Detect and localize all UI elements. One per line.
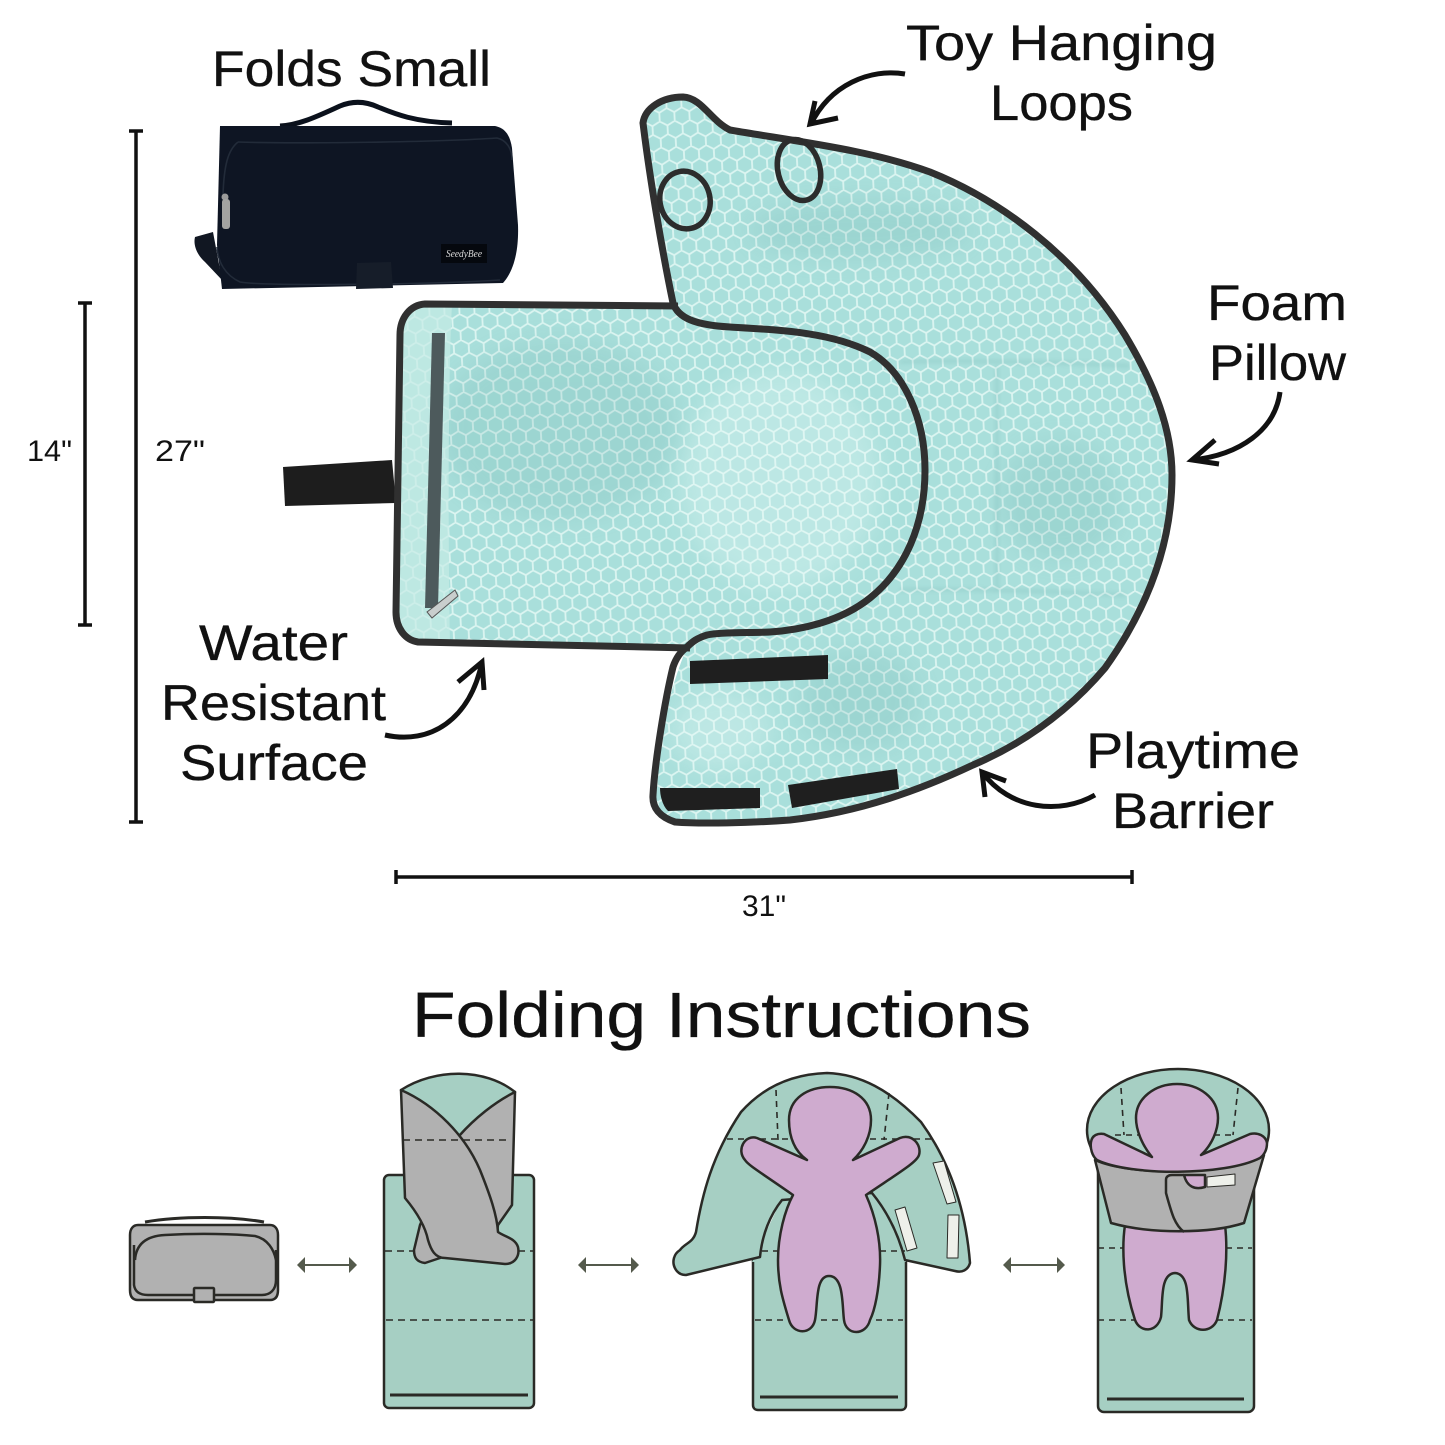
mat inner U edge (673, 303, 925, 647)
callout: Playtime Barrier (982, 723, 1300, 839)
step 3: open mat with baby (674, 1073, 970, 1410)
heading: Folds Small: Folds Small (212, 41, 491, 97)
callout: Toy Hanging Loops (810, 15, 1217, 131)
photo: folded black bag (194, 102, 518, 289)
arrow: between steps 1 and 2 (297, 1257, 357, 1273)
dimension line: 14 inch (78, 303, 92, 625)
callout: Water Resistant Surface: Resistant (161, 675, 386, 731)
label: 27 inches: 27" (155, 435, 205, 468)
velcro strips (660, 655, 899, 811)
zipper (425, 333, 458, 618)
changing panel edge (396, 304, 690, 648)
photo: folded black bag: SeedyBee (446, 249, 483, 260)
step 1: folded bag (130, 1218, 278, 1302)
black strap (283, 460, 396, 506)
step 2: half-folded mat (384, 1074, 534, 1408)
callout: Water Resistant Surface: Surface (180, 735, 368, 791)
callout: Foam Pillow: Pillow (1209, 335, 1347, 391)
callout: Water Resistant Surface: Water (199, 615, 348, 671)
photo: open changing mat (396, 97, 1172, 823)
zipper side light band (396, 304, 452, 645)
dimension line: 27 inch (129, 131, 143, 822)
label: 14 inches: 14" (27, 435, 72, 468)
callout: Toy Hanging Loops: Toy Hanging (906, 15, 1217, 71)
callout: Foam Pillow: Foam (1207, 275, 1347, 331)
heading: Folding Instructions: Folding Instructions (412, 979, 1031, 1051)
dimension line: 31 inch (396, 870, 1132, 884)
callout: Playtime Barrier: Playtime (1086, 723, 1300, 779)
label: 31 inches: 31" (742, 890, 786, 923)
toy rings (655, 135, 827, 234)
callout: Foam Pillow (1192, 275, 1347, 464)
arrow: between steps 2 and 3 (578, 1257, 639, 1273)
callout: Water Resistant Surface (161, 615, 484, 791)
arrow: between steps 3 and 4 (1003, 1257, 1065, 1273)
step 4: mat folded over baby (1087, 1069, 1269, 1412)
callout: Playtime Barrier: Barrier (1112, 783, 1274, 839)
mat outer edge (643, 97, 1172, 823)
callout: Toy Hanging Loops: Loops (990, 75, 1133, 131)
